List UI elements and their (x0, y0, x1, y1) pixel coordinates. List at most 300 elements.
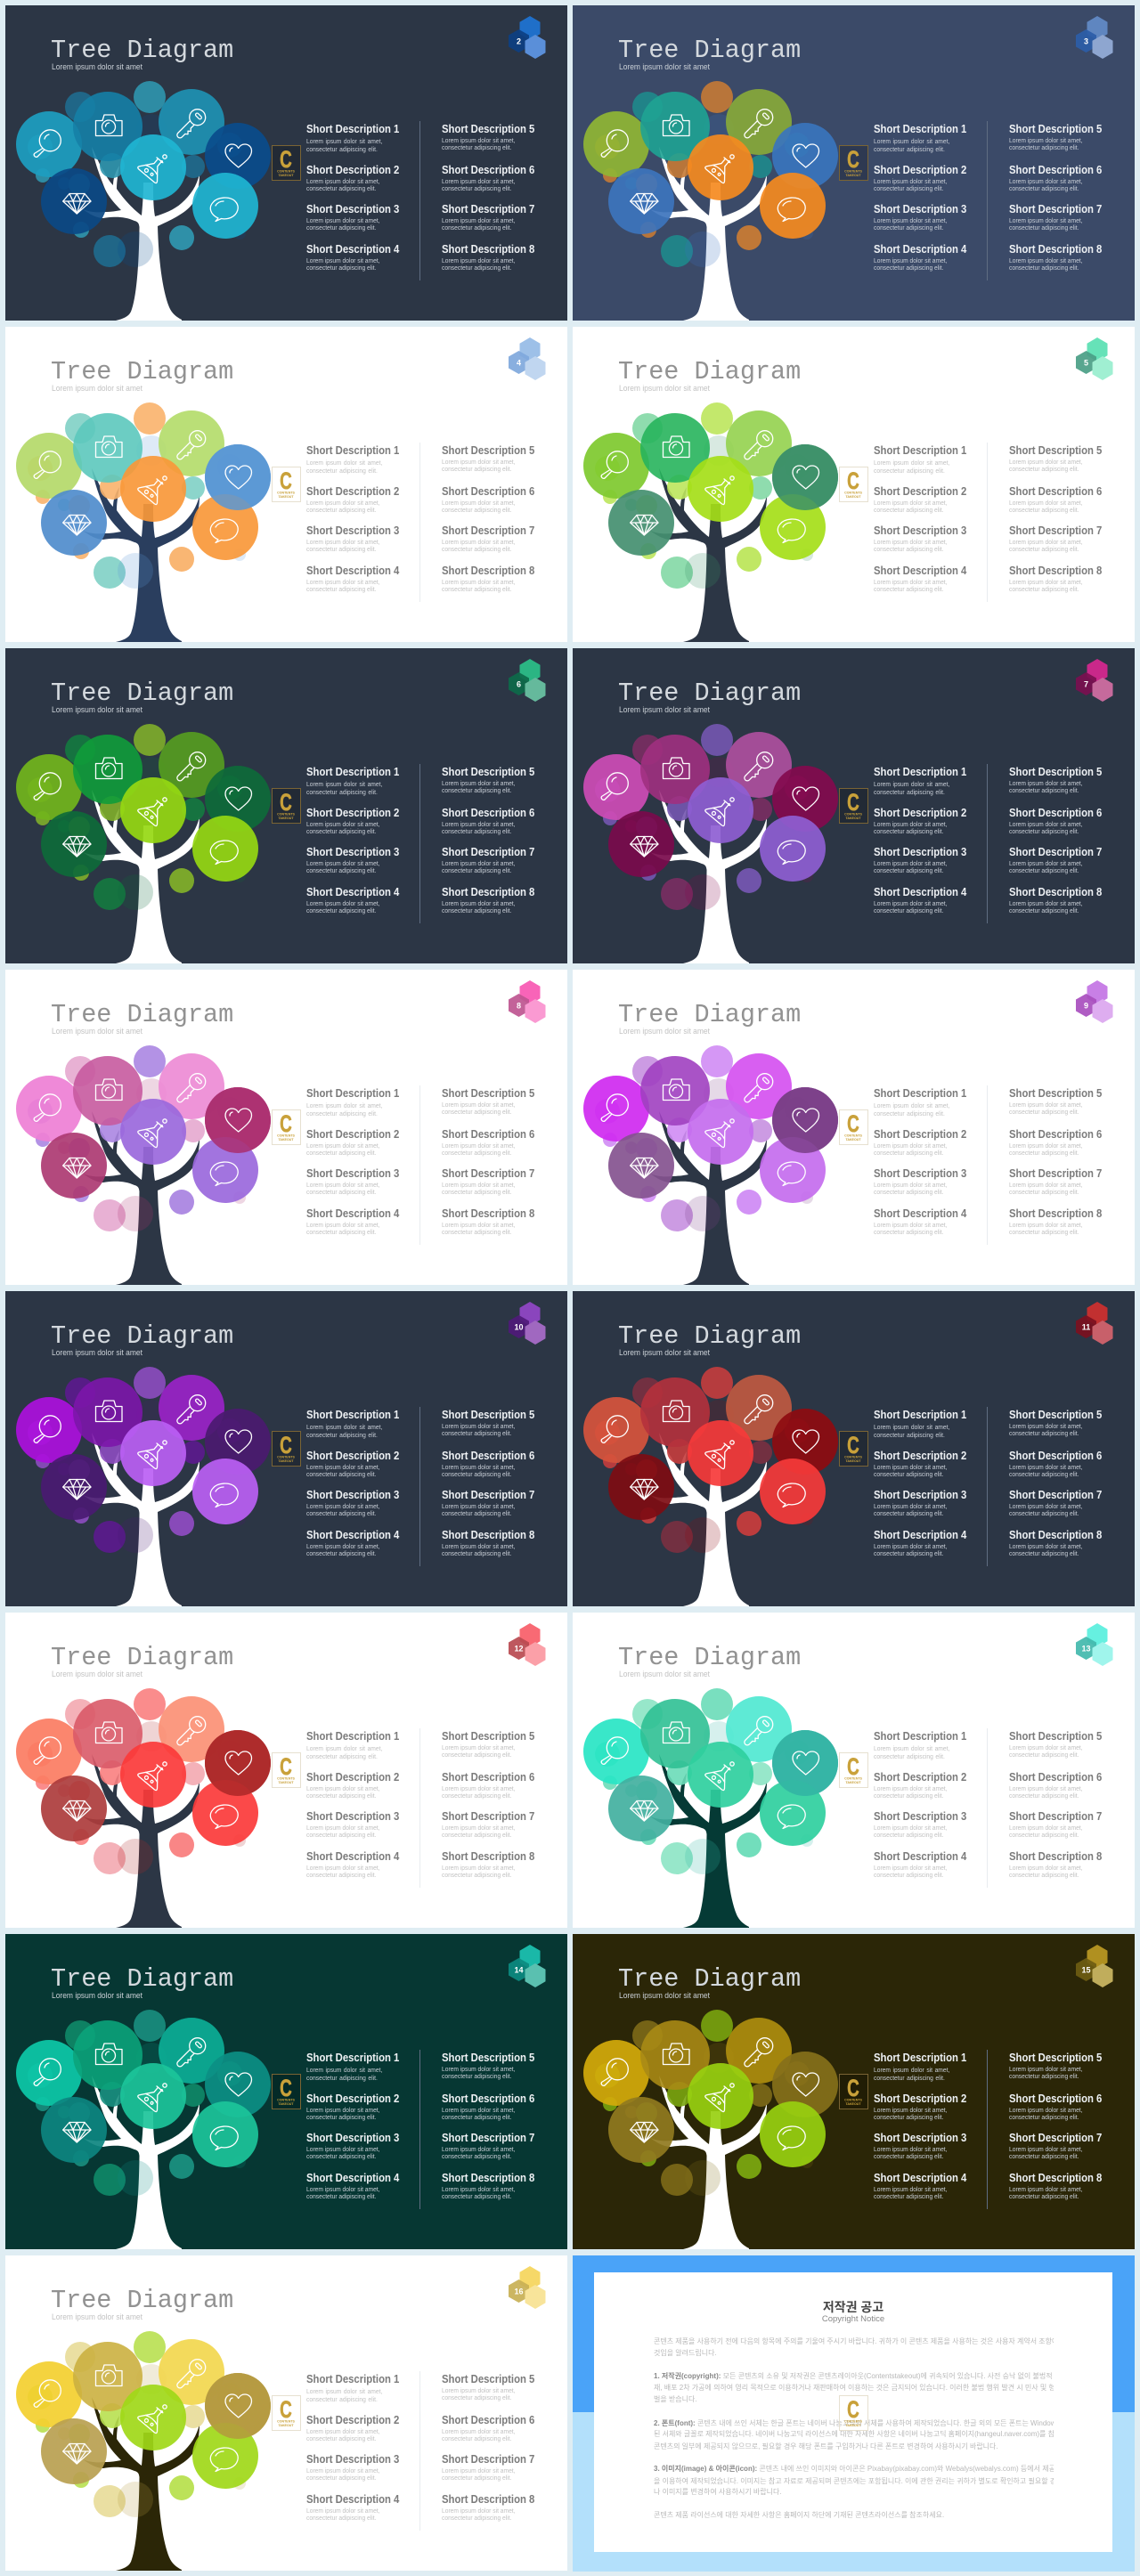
text block 6: Short Description 6 (442, 484, 534, 498)
text block 7: consectetur adipiscing elit. (442, 545, 511, 553)
text block 4: Lorem ipsum dolor sit amet, (874, 2185, 948, 2192)
subtitle: Lorem ipsum dolor sit amet (52, 1670, 142, 1679)
text block 2 (306, 163, 399, 192)
page badge (1076, 1623, 1113, 1666)
text block 7: Lorem ipsum dolor sit amet, (442, 538, 516, 545)
text block 3: Lorem ipsum dolor sit amet, (306, 1501, 380, 1510)
logo: CONTENTS (277, 1777, 295, 1781)
text block 1: Short Description 1 (306, 443, 399, 457)
text block 6: consectetur adipiscing elit. (1009, 1470, 1079, 1478)
text block 8 (442, 2493, 534, 2522)
text block 8: Lorem ipsum dolor sit amet, (1009, 577, 1083, 586)
text block 1: consectetur adipiscing elit. (306, 2074, 378, 2082)
text block 8: consectetur adipiscing elit. (1009, 2192, 1079, 2200)
text block 6: Lorem ipsum dolor sit amet, (442, 1784, 516, 1792)
subtitle: Lorem ipsum dolor sit amet (619, 62, 710, 72)
text block 5: Lorem ipsum dolor sit amet, (442, 1421, 516, 1430)
icon: flask (704, 1117, 737, 1148)
tree trunk (83, 1754, 200, 1928)
tree trunk (83, 147, 200, 321)
icon: diamond (63, 1480, 91, 1499)
text block 5 (442, 1087, 534, 1117)
text block 1: Lorem ipsum dolor sit amet, (306, 137, 382, 144)
logo (839, 467, 867, 502)
text block 3: consectetur adipiscing elit. (874, 223, 943, 232)
page badge (509, 1302, 545, 1345)
text block 8 (442, 886, 534, 915)
icon: heart (225, 2073, 251, 2096)
text block 1: consectetur adipiscing elit. (874, 467, 945, 475)
text block 2: Lorem ipsum dolor sit amet, (306, 1784, 380, 1792)
text block 8: Lorem ipsum dolor sit amet, (442, 2506, 516, 2515)
logo: CONTENTS (844, 2420, 862, 2424)
text block 4: Short Description 4 (874, 1528, 966, 1541)
tree trunk (650, 2076, 767, 2249)
text block 2: consectetur adipiscing elit. (306, 1470, 376, 1478)
text block 4 (306, 2172, 399, 2201)
text block 2: consectetur adipiscing elit. (306, 1792, 376, 1800)
text block 4: consectetur adipiscing elit. (874, 585, 943, 593)
icon: speech bubble (210, 198, 238, 221)
icon: key (172, 1070, 208, 1107)
text block 8: Lorem ipsum dolor sit amet, (1009, 1863, 1083, 1872)
text block 3: Short Description 3 (306, 1166, 399, 1180)
text block 7: Lorem ipsum dolor sit amet, (442, 1501, 516, 1510)
icon: magnifier (601, 451, 628, 478)
logo: TAKEOUT (845, 495, 861, 499)
text block 6 (1009, 807, 1102, 835)
text block 8: Short Description 8 (442, 2492, 534, 2506)
icon: speech bubble (210, 1162, 238, 1186)
text block 4 (874, 2172, 966, 2201)
text block 4: Short Description 4 (874, 1849, 966, 1863)
title: Tree Diagram (51, 357, 233, 386)
panel: copyright notice (573, 2255, 1135, 2572)
icon: key (739, 1070, 776, 1107)
intro text line 2: 것임을 알려드립니다. (654, 2349, 717, 2357)
text block 3 (306, 2453, 399, 2483)
foliage bubbles (583, 2010, 838, 2196)
text block 8: consectetur adipiscing elit. (442, 2514, 511, 2522)
text block 4: Short Description 4 (874, 2171, 966, 2184)
text block 7 (1009, 1167, 1102, 1197)
text block 1 (306, 122, 399, 153)
text block 1: Lorem ipsum dolor sit amet, (874, 458, 949, 467)
logo: TAKEOUT (278, 1138, 294, 1142)
text block 7: Short Description 7 (442, 1488, 534, 1501)
text block 8 (442, 564, 534, 593)
logo (839, 1752, 867, 1788)
text block 7: Short Description 7 (1009, 1166, 1102, 1180)
logo: TAKEOUT (845, 2102, 861, 2106)
icon: key (172, 749, 208, 785)
icon: heart (225, 466, 251, 489)
icon: magnifier (34, 451, 61, 478)
logo: TAKEOUT (278, 2424, 294, 2427)
icon: camera (96, 2365, 122, 2386)
text block 4: Lorem ipsum dolor sit amet, (874, 577, 948, 586)
text block 3: Lorem ipsum dolor sit amet, (306, 215, 380, 224)
text block 4: Short Description 4 (874, 1207, 966, 1220)
text block 8: Lorem ipsum dolor sit amet, (1009, 1220, 1083, 1229)
tree trunk (83, 2076, 200, 2249)
text block 7: Lorem ipsum dolor sit amet, (442, 1181, 516, 1188)
text block 1: Short Description 1 (306, 2051, 399, 2064)
text block 8: consectetur adipiscing elit. (1009, 906, 1079, 914)
text block 5 (442, 122, 534, 151)
text block 7: Short Description 7 (442, 1809, 534, 1823)
logo: C (280, 2075, 292, 2101)
text block 6: consectetur adipiscing elit. (442, 827, 511, 835)
text block 7: consectetur adipiscing elit. (1009, 1188, 1079, 1196)
notice subheading: Copyright Notice (822, 2314, 884, 2324)
text block 4: Short Description 4 (874, 885, 966, 898)
logo: C (847, 146, 859, 173)
subtitle: Lorem ipsum dolor sit amet (619, 1027, 710, 1036)
logo: TAKEOUT (278, 174, 294, 177)
page badge (509, 1623, 545, 1666)
text block 2 (306, 1450, 399, 1478)
text block 2: Short Description 2 (306, 2413, 399, 2426)
text block 5: consectetur adipiscing elit. (442, 465, 511, 473)
text block 1: consectetur adipiscing elit. (306, 145, 378, 153)
logo: C (280, 1110, 292, 1137)
text block 8: consectetur adipiscing elit. (442, 2192, 511, 2200)
logo: TAKEOUT (845, 1781, 861, 1784)
page badge: 2 (517, 37, 521, 46)
text block 1: consectetur adipiscing elit. (874, 1109, 945, 1117)
text block 3: Lorem ipsum dolor sit amet, (874, 858, 948, 867)
text block 6: Lorem ipsum dolor sit amet, (442, 499, 516, 506)
text block 6: Lorem ipsum dolor sit amet, (1009, 819, 1083, 828)
text block 4: consectetur adipiscing elit. (306, 264, 376, 272)
text block 6 (1009, 484, 1102, 514)
text block 3: consectetur adipiscing elit. (874, 1188, 943, 1196)
icon: diamond (631, 1800, 658, 1821)
text block 2: Short Description 2 (874, 163, 966, 176)
subtitle: Lorem ipsum dolor sit amet (52, 1348, 142, 1358)
logo: C (847, 1432, 859, 1459)
title: Tree Diagram (51, 1321, 233, 1351)
text block 2 (306, 484, 399, 514)
text block 5 (1009, 2052, 1102, 2080)
panel: slide 5 (573, 327, 1135, 642)
icon: key (172, 2035, 208, 2071)
text block 3: consectetur adipiscing elit. (874, 866, 943, 874)
icon: magnifier (34, 1737, 61, 1764)
text block 2: Short Description 2 (874, 806, 966, 819)
icon: diamond (63, 194, 91, 214)
text block 1: Short Description 1 (306, 1408, 399, 1421)
text block 7: Lorem ipsum dolor sit amet, (1009, 215, 1083, 224)
text block 5: Lorem ipsum dolor sit amet, (1009, 1101, 1083, 1108)
text block 8 (1009, 242, 1102, 272)
text block 8: consectetur adipiscing elit. (442, 264, 511, 272)
title: Tree Diagram (51, 1000, 233, 1029)
text block 6: consectetur adipiscing elit. (442, 1149, 511, 1157)
text block 7: Lorem ipsum dolor sit amet, (442, 2466, 516, 2474)
subtitle: Lorem ipsum dolor sit amet (619, 1348, 710, 1358)
text block 3 (874, 524, 966, 553)
foliage bubbles (583, 402, 838, 589)
text block 3 (306, 202, 399, 232)
logo (839, 1109, 867, 1145)
text block 1: Short Description 1 (874, 1408, 966, 1421)
text block 5: Short Description 5 (442, 122, 534, 135)
text block 2 (874, 163, 966, 192)
text block 2 (874, 2092, 966, 2121)
text block 4 (874, 1850, 966, 1879)
text block 6: Short Description 6 (442, 806, 534, 819)
text block 5 (1009, 1409, 1102, 1437)
icon: magnifier (34, 130, 61, 157)
text block 2: Lorem ipsum dolor sit amet, (306, 819, 380, 828)
text block 8: Short Description 8 (442, 2171, 534, 2184)
foliage bubbles (16, 2331, 271, 2517)
text block 7 (1009, 1489, 1102, 1517)
text block 5: Lorem ipsum dolor sit amet, (442, 1743, 516, 1751)
logo: C (280, 467, 292, 494)
foliage bubbles (16, 724, 271, 910)
text block 4: Short Description 4 (874, 242, 966, 256)
text block 5 (1009, 443, 1102, 473)
text block 6 (442, 484, 534, 514)
icon: flask (137, 1438, 169, 1469)
logo: C (847, 467, 859, 494)
icon: heart (793, 144, 819, 167)
text block 7 (442, 2132, 534, 2160)
text block 1 (874, 2052, 966, 2082)
text block 7: consectetur adipiscing elit. (442, 223, 511, 232)
text block 6: Lorem ipsum dolor sit amet, (1009, 499, 1083, 506)
icon: magnifier (601, 1416, 628, 1442)
text block 7: Lorem ipsum dolor sit amet, (1009, 1181, 1083, 1188)
text block 4: Lorem ipsum dolor sit amet, (306, 2506, 380, 2515)
icon: camera (663, 1079, 689, 1101)
text block 1 (306, 1730, 399, 1760)
icon: magnifier (34, 1094, 61, 1121)
text block 4: Short Description 4 (306, 1849, 399, 1863)
icon: diamond (631, 515, 658, 535)
text block 8: Short Description 8 (1009, 885, 1102, 898)
page badge (1076, 980, 1113, 1023)
text block 3: Lorem ipsum dolor sit amet, (874, 538, 948, 545)
icon: camera (96, 1722, 122, 1743)
text block 6: Lorem ipsum dolor sit amet, (1009, 1142, 1083, 1149)
text block 7: Short Description 7 (442, 2452, 534, 2466)
icon: flask (704, 1759, 737, 1791)
text block 3 (306, 1489, 399, 1517)
text block 3: Lorem ipsum dolor sit amet, (874, 215, 948, 224)
text block 1: consectetur adipiscing elit. (306, 788, 378, 796)
text block 1: consectetur adipiscing elit. (306, 1752, 378, 1760)
text block 2: Short Description 2 (306, 163, 399, 176)
text block 6: consectetur adipiscing elit. (442, 1792, 511, 1800)
icon: heart (793, 1430, 819, 1453)
icon: magnifier (601, 2059, 628, 2085)
icon: heart (793, 787, 819, 810)
panel: slide 12 (5, 1613, 567, 1928)
text block 2: Lorem ipsum dolor sit amet, (874, 2105, 948, 2114)
logo: C (847, 1753, 859, 1780)
icon: heart (225, 144, 251, 167)
text block 5 (442, 2052, 534, 2080)
text block 1: consectetur adipiscing elit. (306, 467, 378, 475)
text block 2 (306, 2414, 399, 2443)
icon: speech bubble (778, 1483, 805, 1507)
icon: camera (96, 2044, 122, 2064)
text block 2: Lorem ipsum dolor sit amet, (874, 1784, 948, 1792)
text block 2: Short Description 2 (306, 1449, 399, 1462)
text block 3: consectetur adipiscing elit. (306, 866, 376, 874)
icon: diamond (63, 1158, 91, 1178)
subtitle: Lorem ipsum dolor sit amet (619, 705, 710, 715)
text block 3 (306, 524, 399, 553)
text block 6: consectetur adipiscing elit. (1009, 827, 1079, 835)
icon: flask (137, 1117, 169, 1148)
text block 4: Short Description 4 (306, 242, 399, 256)
text block 4: Lorem ipsum dolor sit amet, (306, 1863, 380, 1872)
text block 2: Short Description 2 (874, 484, 966, 498)
text block 8: Lorem ipsum dolor sit amet, (442, 256, 516, 264)
page badge: 12 (514, 1644, 524, 1653)
text block 7: Lorem ipsum dolor sit amet, (442, 1824, 516, 1831)
text block 5 (1009, 1730, 1102, 1759)
page badge: 8 (517, 1001, 521, 1010)
logo: TAKEOUT (845, 817, 861, 820)
text block 8: Short Description 8 (442, 1528, 534, 1541)
text block 4 (306, 885, 399, 914)
text block 7 (442, 524, 534, 553)
text block 5: Lorem ipsum dolor sit amet, (1009, 778, 1083, 787)
text block 8: Short Description 8 (442, 564, 534, 577)
page badge (509, 16, 545, 59)
logo: CONTENTS (844, 1455, 862, 1459)
text block 7: consectetur adipiscing elit. (1009, 545, 1079, 553)
text block 3: Short Description 3 (306, 1809, 399, 1823)
text block 1: Lorem ipsum dolor sit amet, (874, 137, 949, 144)
icon: heart (225, 787, 251, 810)
text block 6: Lorem ipsum dolor sit amet, (1009, 1462, 1083, 1471)
text block 4: consectetur adipiscing elit. (306, 585, 376, 593)
logo (839, 146, 867, 180)
text block 3: Lorem ipsum dolor sit amet, (874, 1501, 948, 1510)
text block 1: Short Description 1 (874, 765, 966, 778)
text block 5: Short Description 5 (442, 2051, 534, 2064)
text block 4: Short Description 4 (306, 2171, 399, 2184)
foliage bubbles (16, 81, 271, 267)
text block 3 (874, 2132, 966, 2160)
text block 7: Short Description 7 (442, 524, 534, 537)
image clause line 3: 나 이미지를 변경하여 사용하시기 바랍니다. (654, 2488, 782, 2496)
panel: slide 11 (573, 1291, 1135, 1606)
text block 8: Lorem ipsum dolor sit amet, (1009, 256, 1083, 264)
text block 2: Lorem ipsum dolor sit amet, (306, 176, 380, 185)
text block 4: Lorem ipsum dolor sit amet, (306, 256, 380, 264)
text block 3: Lorem ipsum dolor sit amet, (874, 2144, 948, 2153)
text block 3: consectetur adipiscing elit. (874, 2152, 943, 2160)
text block 3: Short Description 3 (306, 2452, 399, 2466)
logo: TAKEOUT (278, 2102, 294, 2106)
icon: key (739, 1392, 776, 1428)
text block 8: consectetur adipiscing elit. (1009, 264, 1079, 272)
text block 2: consectetur adipiscing elit. (874, 2113, 943, 2121)
text block 7: Short Description 7 (1009, 2131, 1102, 2144)
icon: diamond (631, 2123, 658, 2142)
icon: magnifier (34, 773, 61, 800)
page badge (1076, 1945, 1113, 1987)
logo: CONTENTS (277, 492, 295, 495)
text block 8 (1009, 1850, 1102, 1879)
text block 7: Lorem ipsum dolor sit amet, (1009, 1824, 1083, 1831)
icon: speech bubble (778, 2126, 805, 2149)
text block 3: Short Description 3 (306, 845, 399, 858)
logo (273, 789, 301, 823)
title: Tree Diagram (51, 679, 233, 708)
logo: C (280, 1432, 292, 1459)
panel: slide 4 (5, 327, 567, 642)
text block 1: Lorem ipsum dolor sit amet, (306, 458, 382, 467)
text block 7: consectetur adipiscing elit. (1009, 1831, 1079, 1839)
text block 6: Short Description 6 (442, 2413, 534, 2426)
text block 5: consectetur adipiscing elit. (442, 786, 511, 794)
text block 5: consectetur adipiscing elit. (442, 143, 511, 151)
tree trunk (650, 468, 767, 642)
text block 7 (442, 845, 534, 874)
text block 8: Lorem ipsum dolor sit amet, (442, 2185, 516, 2192)
logo: CONTENTS (844, 1777, 862, 1781)
logo: C (847, 2396, 859, 2423)
text block 8 (1009, 2172, 1102, 2201)
subtitle: Lorem ipsum dolor sit amet (619, 1670, 710, 1679)
foliage bubbles (583, 724, 838, 910)
text block 6: Short Description 6 (442, 1127, 534, 1141)
tree trunk (650, 1754, 767, 1928)
text block 1 (874, 1730, 966, 1760)
text block 7: consectetur adipiscing elit. (442, 1509, 511, 1517)
panel: slide 10 (5, 1291, 567, 1606)
text block 4 (306, 1850, 399, 1879)
text block 3: Short Description 3 (306, 202, 399, 215)
text block 2 (306, 806, 399, 835)
icon: camera (663, 758, 689, 778)
text block 1: Short Description 1 (306, 122, 399, 135)
text block 6: consectetur adipiscing elit. (442, 2113, 511, 2121)
text block 4: Short Description 4 (306, 885, 399, 898)
panel: slide 8 (5, 970, 567, 1285)
text block 1: Short Description 1 (306, 765, 399, 778)
text block 5: Short Description 5 (442, 1086, 534, 1100)
text block 2: Lorem ipsum dolor sit amet, (306, 1142, 380, 1149)
text block 2 (874, 484, 966, 514)
text block 4: Short Description 4 (306, 564, 399, 577)
text block 8: Lorem ipsum dolor sit amet, (442, 1542, 516, 1549)
panel: slide 15 (573, 1934, 1135, 2249)
text block 1 (306, 1087, 399, 1117)
icon: speech bubble (778, 519, 805, 543)
text block 7: Lorem ipsum dolor sit amet, (1009, 538, 1083, 545)
foliage bubbles (16, 1688, 271, 1874)
text block 7: Lorem ipsum dolor sit amet, (1009, 1501, 1083, 1510)
logo (839, 789, 867, 823)
icon: heart (225, 1751, 251, 1775)
text block 3 (306, 1167, 399, 1197)
subtitle: Lorem ipsum dolor sit amet (52, 2312, 142, 2322)
text block 7: Short Description 7 (442, 2131, 534, 2144)
icon: speech bubble (778, 841, 805, 864)
text block 5 (442, 765, 534, 794)
text block 1: Short Description 1 (874, 2051, 966, 2064)
